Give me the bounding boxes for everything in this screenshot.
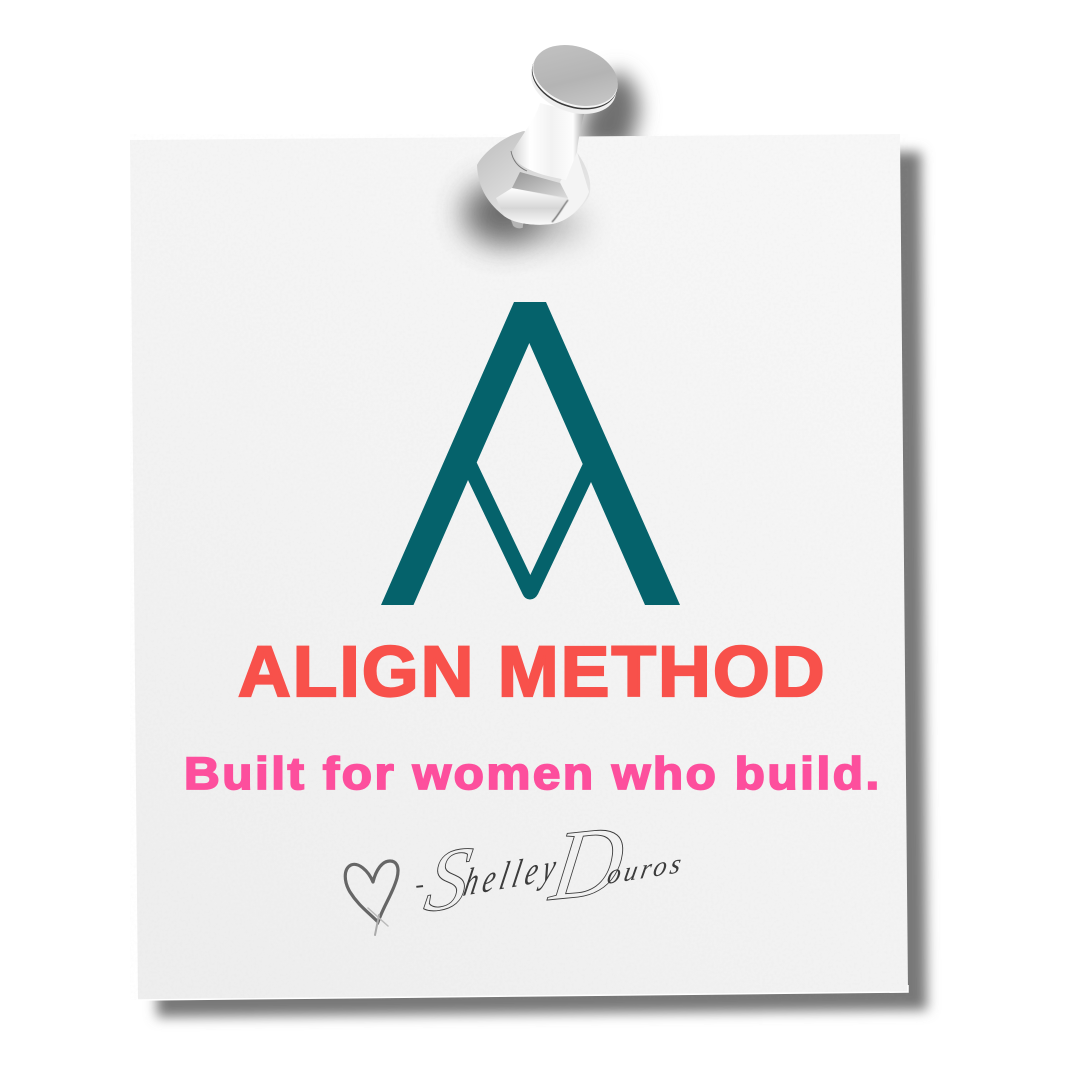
icon: brush heart bbox=[345, 861, 398, 935]
pin shadow on paper bbox=[463, 181, 585, 245]
pin right facet bbox=[552, 152, 589, 224]
pin base facets bbox=[496, 188, 568, 225]
signature: S bbox=[418, 827, 478, 932]
pin head face bbox=[525, 34, 626, 117]
pin body bbox=[512, 103, 584, 180]
pin head shadow on background bbox=[580, 72, 639, 150]
pin plate slit bbox=[552, 200, 568, 222]
signature: ouros bbox=[605, 848, 684, 891]
pin head rim bbox=[522, 41, 625, 125]
signature bbox=[414, 803, 684, 932]
signature: - bbox=[414, 869, 425, 899]
signature: helley bbox=[460, 845, 560, 905]
pin base plate bbox=[477, 131, 590, 225]
title: ALIGN METHOD bbox=[238, 633, 824, 712]
pin body seam bbox=[511, 151, 527, 171]
signature: D bbox=[543, 803, 631, 922]
pin head dark edge bbox=[523, 37, 626, 120]
pin window bbox=[512, 172, 568, 198]
tagline: Built for women who build. bbox=[184, 749, 879, 799]
icon: push pin bbox=[477, 34, 626, 229]
paper drop shadow bbox=[157, 152, 927, 1017]
paper note bbox=[130, 134, 908, 1000]
pin needle bbox=[510, 218, 524, 229]
pin head highlight edge bbox=[524, 35, 626, 119]
logo: A mark bbox=[381, 302, 680, 605]
